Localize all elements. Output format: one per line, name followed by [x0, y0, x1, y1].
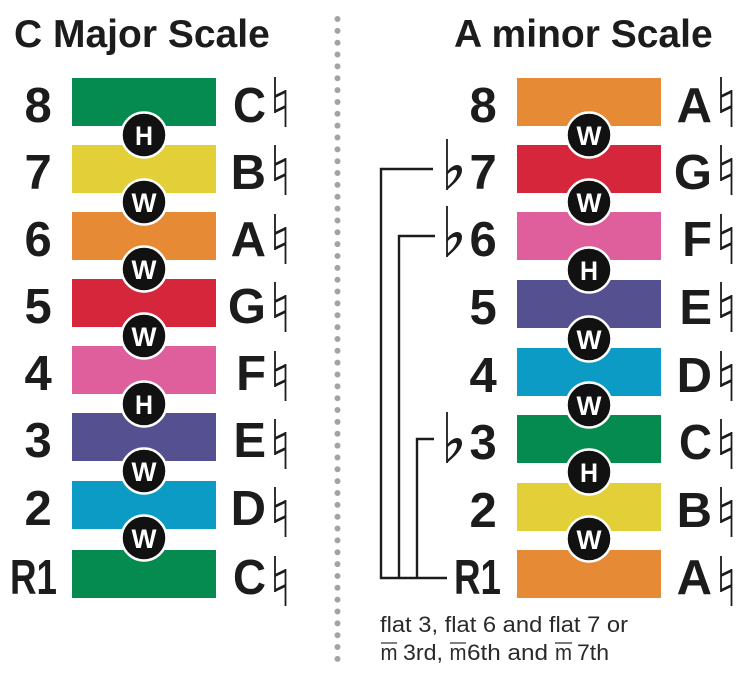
C major note letters: [228, 79, 266, 605]
A minor step markers: W: [576, 391, 602, 421]
C major note letters: C: [233, 79, 266, 133]
C major degree numbers: 4: [24, 347, 52, 401]
A minor note letters: [674, 79, 712, 605]
C major degree numbers: 6: [24, 213, 52, 267]
C major colour bars: [72, 78, 216, 598]
heading: C Major Scale: C Major Scale: [14, 13, 270, 56]
C major step markers: W: [132, 188, 157, 218]
A minor step markers: W: [576, 525, 602, 555]
A minor note letters: F: [682, 213, 712, 267]
panel: A minor scale: [380, 13, 732, 665]
C major step markers: W: [132, 255, 157, 285]
A minor note letters: A: [677, 551, 712, 605]
A minor note letters: A: [677, 79, 712, 133]
A minor degree numbers: 5: [470, 281, 497, 335]
A minor degree numbers: 2: [470, 484, 497, 538]
C major note letters: A: [231, 213, 266, 267]
C major step markers: [122, 112, 166, 560]
flat signs: [447, 139, 462, 463]
A minor step markers: W: [576, 188, 602, 218]
caption: flat degrees: 7th: [577, 640, 609, 665]
A minor colour bars: [517, 78, 661, 598]
C major note letters: F: [236, 347, 266, 401]
panel: C Major scale: [10, 13, 286, 606]
A minor note letters: B: [677, 484, 712, 538]
C major note letters: G: [228, 280, 266, 334]
C major degree numbers: 3: [24, 414, 52, 468]
caption: flat degrees: 6th and: [467, 640, 548, 665]
C major step markers: W: [132, 322, 157, 352]
A minor note letters: D: [677, 349, 712, 403]
C major degree numbers: 5: [24, 280, 52, 334]
C major step markers: H: [135, 121, 153, 151]
C major note letters: C: [233, 551, 266, 605]
A minor degree numbers: 8: [470, 79, 497, 133]
A minor degree numbers: 4: [470, 349, 497, 403]
caption: flat degrees: flat 3, flat 6 and flat 7 or: [380, 612, 628, 637]
A minor note letters: C: [679, 416, 712, 470]
A minor step markers: H: [580, 458, 598, 488]
A minor step markers: W: [576, 325, 602, 355]
heading: A minor Scale: A minor Scale: [454, 13, 713, 56]
C major degree numbers: 8: [24, 79, 52, 133]
A minor step markers: W: [576, 121, 602, 151]
C major degree numbers: 7: [24, 146, 52, 200]
A minor degree numbers: 6: [470, 213, 497, 267]
A minor degree numbers: R1: [454, 551, 501, 605]
caption: flat degrees: m: [450, 640, 466, 665]
C major degree numbers: R1: [10, 551, 57, 605]
A minor degree numbers: 7: [470, 146, 497, 200]
C major step markers: W: [132, 524, 157, 554]
C major note letters: E: [233, 414, 266, 468]
A minor step markers: [566, 112, 612, 562]
A minor natural signs: [721, 77, 732, 606]
C major degree numbers: 2: [24, 482, 52, 536]
A minor note letters: E: [679, 281, 712, 335]
C major note letters: B: [231, 146, 266, 200]
A minor degree numbers: 3: [470, 416, 497, 470]
caption: flat degrees: 3rd,: [403, 640, 443, 665]
caption: flat degrees: [380, 612, 628, 665]
A minor step markers: H: [580, 256, 598, 286]
C major degree numbers: [10, 79, 57, 605]
A minor note letters: G: [674, 146, 712, 200]
C major natural signs: [275, 77, 286, 606]
C major step markers: H: [135, 390, 153, 420]
C major note letters: D: [231, 482, 266, 536]
bracket lines connecting flat degrees to root: [381, 169, 447, 578]
C major step markers: W: [132, 457, 157, 487]
caption: flat degrees: m: [380, 640, 398, 665]
A minor degree numbers: [454, 79, 501, 605]
caption: flat degrees: m: [555, 640, 572, 665]
